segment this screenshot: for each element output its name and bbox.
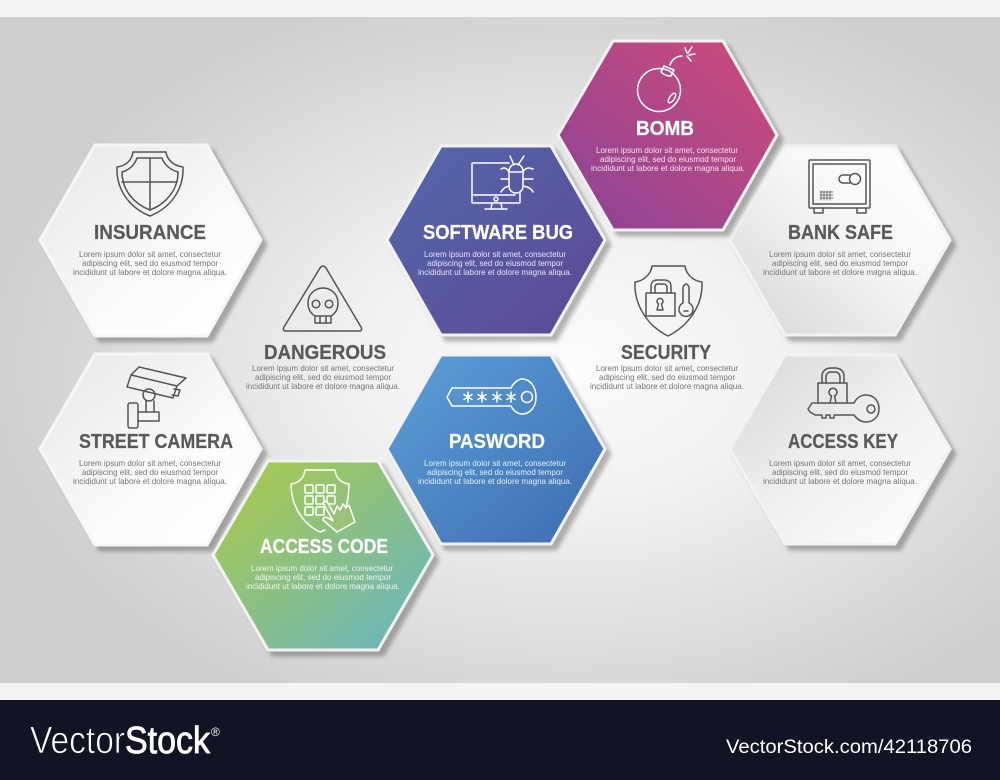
heading: access key: ACCESS KEY: [788, 430, 898, 453]
heading: dangerous: DANGEROUS: [264, 341, 386, 364]
logo: VectorStock: Vector: [30, 720, 125, 762]
icon: software bug: [472, 156, 533, 209]
icon: warning skull: [283, 266, 362, 331]
block: dangerous: [246, 266, 400, 391]
icon: bank safe: [809, 160, 870, 213]
text block: dangerous: [246, 363, 400, 391]
hexagon: bomb: [558, 41, 777, 230]
text block: insurance: [73, 249, 227, 277]
text block: access code: Lorem ipsum dolor sit amet, consectetur: [251, 563, 393, 573]
heading: street camera: STREET CAMERA: [79, 430, 233, 453]
text block: access code: incididunt ut labore et dolore magna aliqua.: [246, 581, 400, 591]
hexagon: software bug: [387, 146, 605, 335]
text block: insurance: adipiscing elit, sed do eiusmod tempor: [82, 258, 218, 268]
text block: dangerous: Lorem ipsum dolor sit amet, consectetur: [252, 363, 394, 373]
text block: software bug: adipiscing elit, sed do eiusmod tempor: [427, 258, 563, 268]
text block: access code: adipiscing elit, sed do eiusmod tempor: [255, 572, 391, 582]
text block: pasword: Lorem ipsum dolor sit amet, consectetur: [424, 458, 566, 468]
text block: bomb: Lorem ipsum dolor sit amet, consectetur: [596, 145, 738, 155]
text block: bomb: [591, 145, 745, 173]
heading: insurance: INSURANCE: [94, 221, 206, 244]
text block: software bug: [418, 249, 572, 277]
text block: dangerous: incididunt ut labore et dolore magna aliqua.: [246, 381, 400, 391]
text block: bank safe: adipiscing elit, sed do eiusmod tempor: [772, 258, 908, 268]
hexagon: pasword: [387, 355, 605, 544]
image id: VectorStock.com/42118706: [726, 737, 972, 758]
hexagon: access key: [730, 355, 950, 544]
text block: bomb: incididunt ut labore et dolore magna aliqua.: [591, 163, 745, 173]
text block: access code: [246, 563, 400, 591]
logo: VectorStock: [30, 720, 220, 762]
icon: password key: [447, 379, 536, 414]
text block: software bug: Lorem ipsum dolor sit amet, consectetur: [424, 249, 566, 259]
text block: security: incididunt ut labore et dolore magna aliqua.: [590, 381, 744, 391]
text block: bank safe: incididunt ut labore et dolore magna aliqua.: [763, 267, 917, 277]
heading: bomb: BOMB: [636, 117, 694, 140]
text block: pasword: [418, 458, 572, 486]
heading: access code: ACCESS CODE: [260, 535, 388, 558]
hexagon: bank safe: [730, 146, 950, 335]
text block: street camera: adipiscing elit, sed do eiusmod tempor: [82, 467, 218, 477]
hexagon: street camera: [40, 354, 261, 545]
heading: pasword: PASWORD: [449, 430, 545, 453]
text block: insurance: incididunt ut labore et dolore magna aliqua.: [73, 267, 227, 277]
text block: access key: adipiscing elit, sed do eiusmod tempor: [772, 467, 908, 477]
text block: access key: incididunt ut labore et dolore magna aliqua.: [763, 476, 917, 486]
text block: access key: [763, 458, 917, 486]
logo: VectorStock: Stock: [125, 720, 211, 762]
text block: street camera: Lorem ipsum dolor sit amet, consectetur: [79, 458, 221, 468]
hexagon: insurance: [40, 145, 261, 336]
icon: access code shield: [291, 470, 355, 532]
text block: insurance: Lorem ipsum dolor sit amet, consectetur: [79, 249, 221, 259]
text block: pasword: adipiscing elit, sed do eiusmod tempor: [427, 467, 563, 477]
text block: security: [590, 363, 744, 391]
hexagon: access code: [213, 461, 433, 650]
heading: software bug: SOFTWARE BUG: [423, 221, 573, 244]
text block: bank safe: [763, 249, 917, 277]
heading: bank safe: BANK SAFE: [788, 221, 893, 244]
text block: street camera: incididunt ut labore et dolore magna aliqua.: [73, 476, 227, 486]
icon: security shield: [635, 266, 702, 336]
text block: bank safe: Lorem ipsum dolor sit amet, consectetur: [769, 249, 911, 259]
icon: lock and key: [808, 368, 879, 422]
text block: dangerous: adipiscing elit, sed do eiusmod tempor: [255, 372, 391, 382]
icon: bomb: [638, 47, 695, 112]
text block: security: Lorem ipsum dolor sit amet, consectetur: [596, 363, 738, 373]
text block: security: adipiscing elit, sed do eiusmod tempor: [599, 372, 735, 382]
text block: access key: Lorem ipsum dolor sit amet, consectetur: [769, 458, 911, 468]
footer bar: [0, 700, 1000, 780]
text block: software bug: incididunt ut labore et dolore magna aliqua.: [418, 267, 572, 277]
icon: street camera: [127, 367, 186, 428]
text block: bomb: adipiscing elit, sed do eiusmod tempor: [600, 154, 736, 164]
text block: street camera: [73, 458, 227, 486]
icon: shield: [117, 152, 183, 216]
heading: security: SECURITY: [621, 341, 711, 364]
logo: VectorStock: ®: [211, 725, 220, 739]
text block: pasword: incididunt ut labore et dolore magna aliqua.: [418, 476, 572, 486]
block: security: [590, 266, 744, 391]
